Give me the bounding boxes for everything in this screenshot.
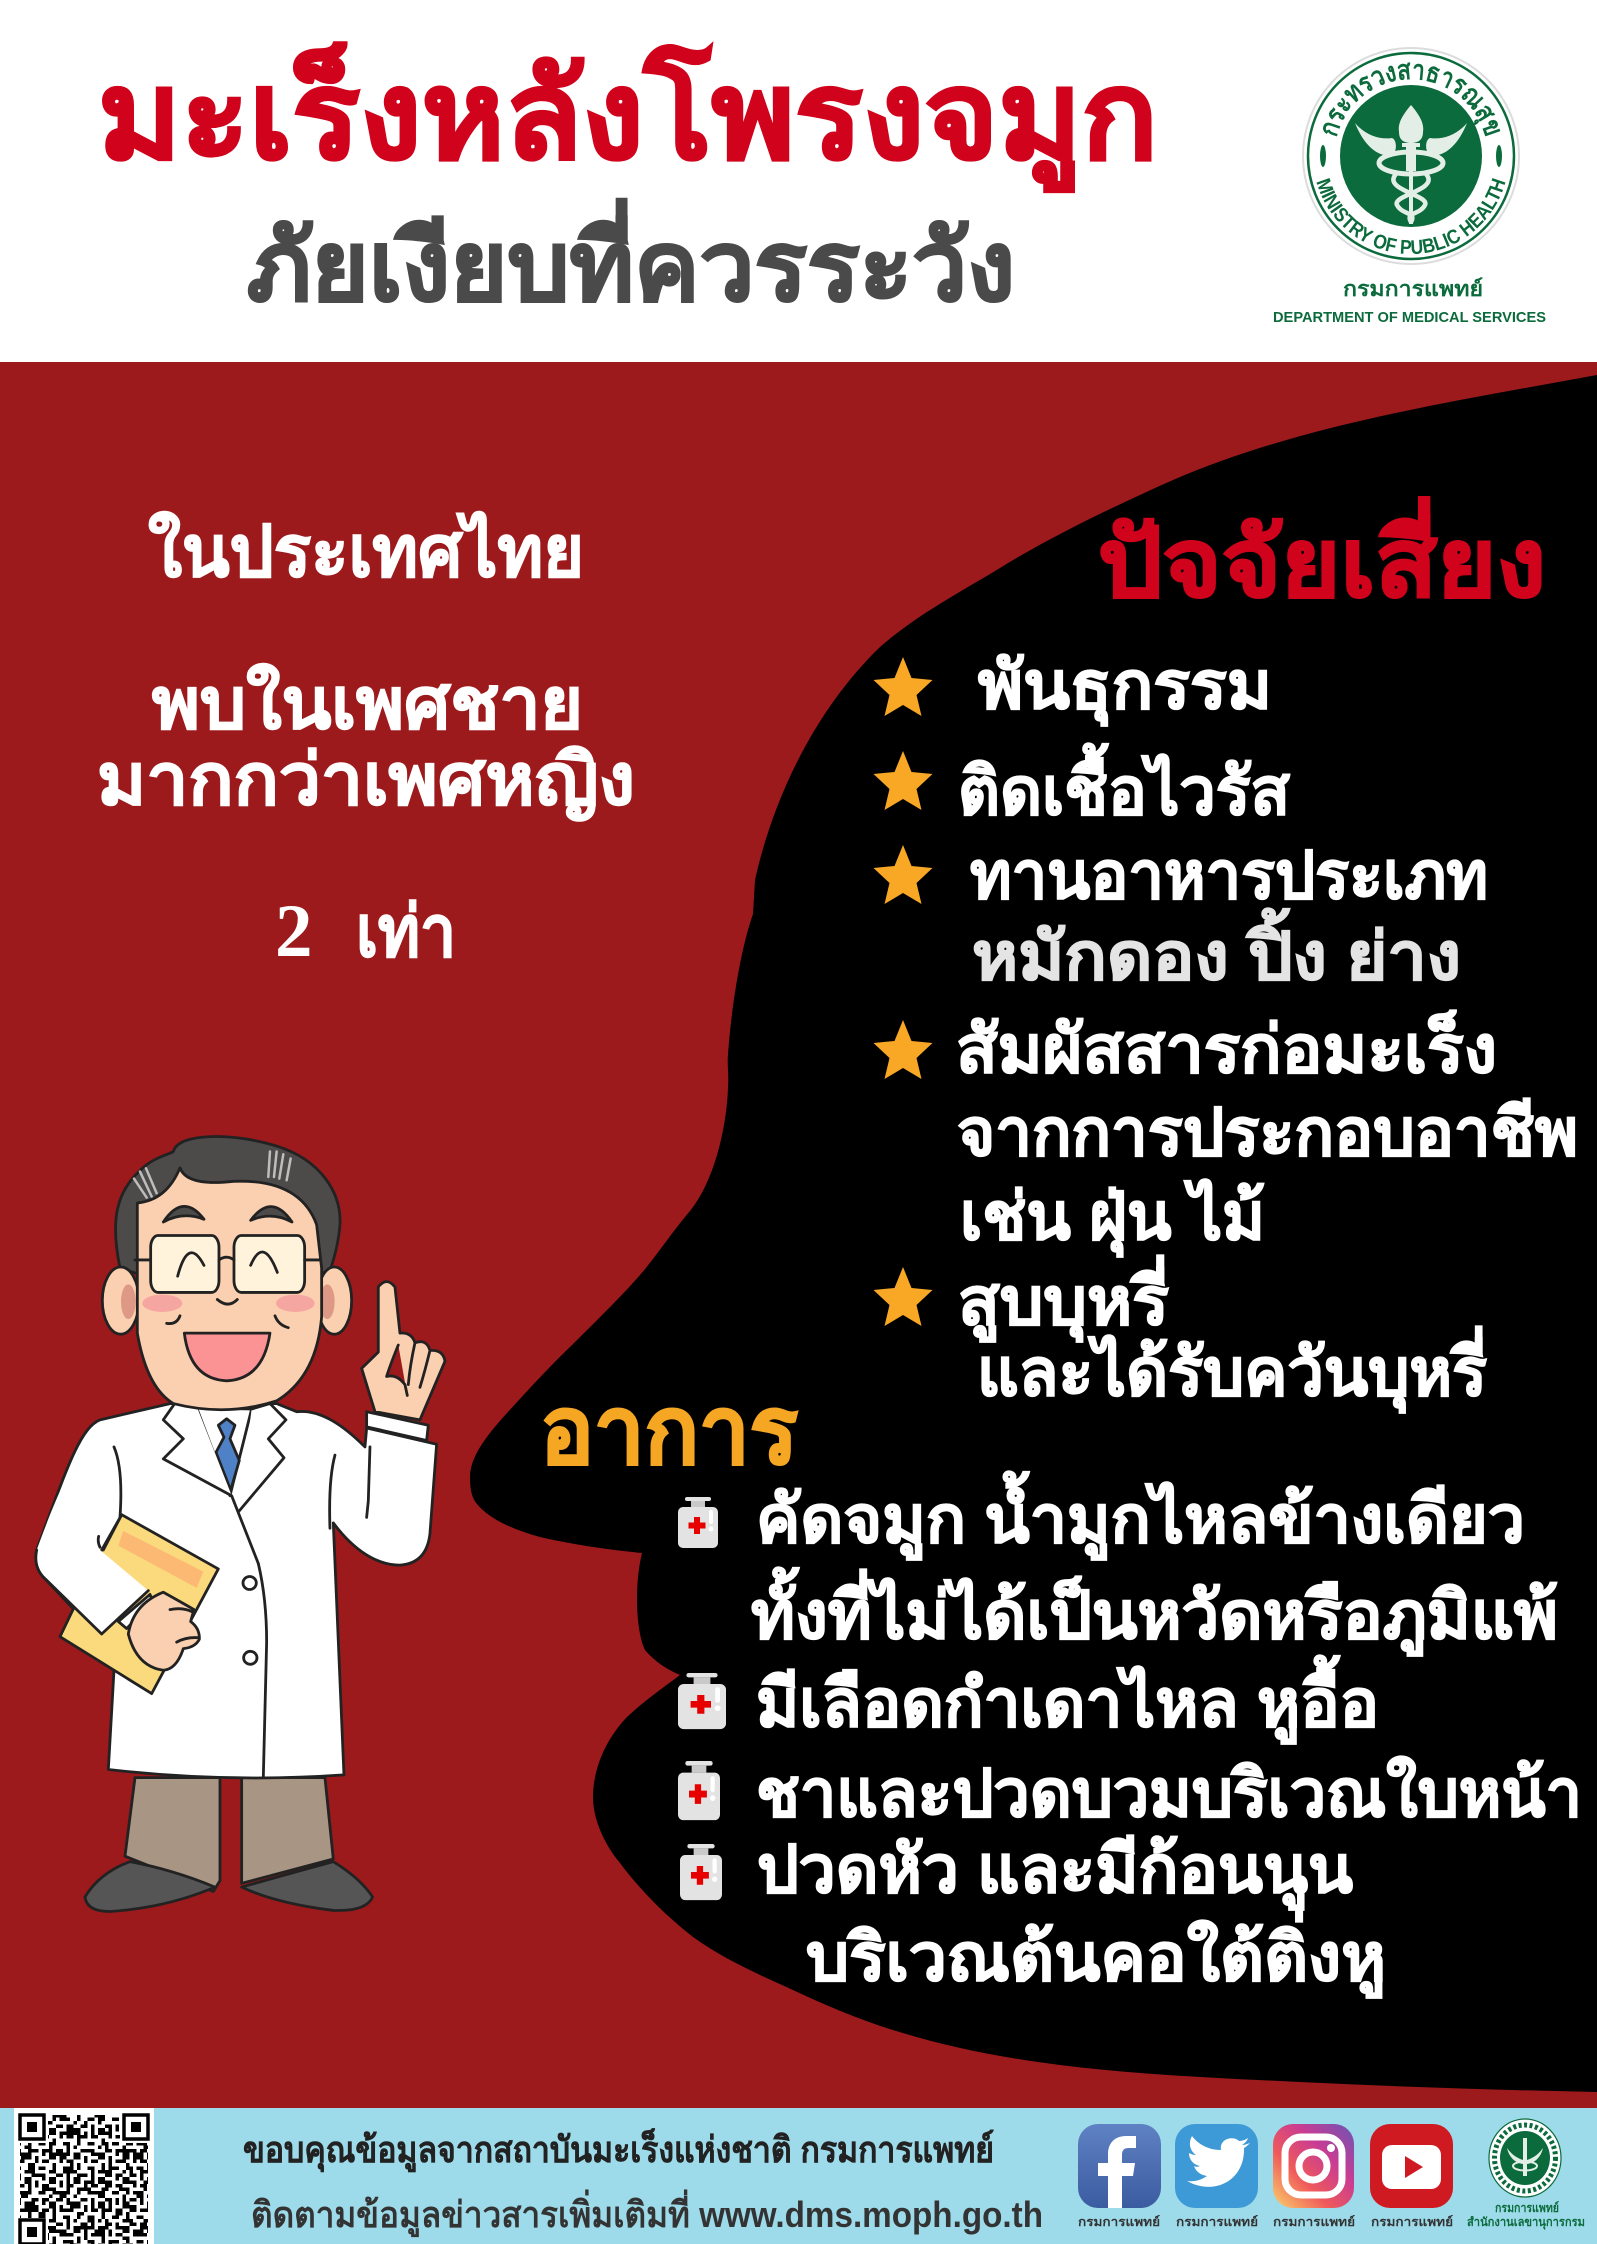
doctor cheeks [142, 1295, 315, 1312]
logo caption: department thai: กรมการแพทย์ [1343, 277, 1483, 301]
doctor folder [60, 1515, 218, 1694]
risk item: smoking: สูบบุหรี่ [958, 1254, 1169, 1343]
logo: ministry of public health seal: MINISTRY OF PUBLIC HEALTH [1316, 178, 1506, 254]
doctor holding hand [128, 1592, 199, 1670]
risk item: carcinogen exposure: จากการประกอบอาชีพ [957, 1095, 1578, 1169]
icon: twitter [1175, 2124, 1258, 2208]
symptom: headache and neck lump [757, 1832, 1386, 1999]
stat: 2 times [275, 890, 456, 973]
symptom: nosebleed: มีเลือดกำเดาไหล หูอื้อ [756, 1654, 1379, 1745]
panel: black head silhouette [470, 375, 1597, 2092]
risk item: carcinogen exposure: สัมผัสสารก่อมะเร็ง [956, 1009, 1497, 1086]
risk item: carcinogen exposure: เช่น ฝุ่น ไม้ [960, 1178, 1265, 1258]
doctor mouth [184, 1333, 270, 1381]
icon: medicine bottle 1 [678, 1497, 718, 1548]
social labels [1078, 2215, 1453, 2229]
footer seal caption: กรมการแพทย์ [1495, 2201, 1559, 2215]
doctor raised hand [362, 1282, 445, 1420]
doctor shoes [85, 1862, 373, 1912]
QR code [14, 2108, 154, 2244]
risk item: smoking: และได้รับควันบุหรี่ [977, 1325, 1487, 1414]
doctor shirt and tie [197, 1408, 252, 1496]
logo: footer seal [1489, 2119, 1561, 2197]
doctor eyebrows [163, 1206, 292, 1222]
doctor ears [102, 1267, 352, 1334]
symptom: congestion [751, 1470, 1558, 1657]
heading: symptoms: อาการ [540, 1378, 798, 1483]
text block: more than women: มากกว่าเพศหญิง [97, 741, 635, 822]
doctor closed eyes [178, 1252, 277, 1276]
risk item: genetics: พันธุกรรม [978, 648, 1272, 727]
risk item: smoking [958, 1254, 1487, 1414]
panel: red background [0, 362, 1597, 2108]
icon: star 4 [874, 1020, 932, 1079]
icon: star 3 [874, 845, 932, 904]
symptom: congestion: ทั้งที่ไม่ได้เป็นหวัดหรือภูมิแพ้ [751, 1566, 1558, 1657]
illustration: doctor [36, 1137, 445, 1912]
social labels: กรมการแพทย์ [1273, 2215, 1355, 2229]
doctor cuff [367, 1412, 428, 1440]
subtitle: ภัยเงียบที่ควรระวัง [247, 198, 1015, 321]
doctor lapels [163, 1401, 286, 1563]
symptom: headache and neck lump: บริเวณต้นคอใต้ติ่งหู [806, 1910, 1386, 1999]
doctor coat [36, 1404, 437, 1778]
footer seal caption: สำนักงานเลขานุการกรม [1467, 2215, 1585, 2230]
icon: medicine bottle 2 [678, 1673, 726, 1729]
stat: 2 times: เท่า [356, 893, 456, 972]
doctor trousers [125, 1778, 333, 1891]
logo: ministry of public health seal: กระทรวงสาธารณสุข [1322, 62, 1500, 136]
title: มะเร็งหลังโพรงจมูก [98, 42, 1158, 192]
doctor glasses [135, 1236, 321, 1292]
icon: star 1 [874, 657, 932, 716]
stat: 2 times: 2 [275, 890, 312, 973]
social labels: กรมการแพทย์ [1371, 2215, 1453, 2229]
doctor coat seams and buttons [243, 1447, 370, 1778]
logo caption: department english: DEPARTMENT OF MEDICAL SERVICES [1273, 309, 1546, 326]
heading: risk factors: ปัจจัยเสี่ยง [1098, 496, 1546, 617]
icon: medicine bottle 4 [680, 1844, 722, 1900]
text block: found in men: พบในเพศชาย [152, 662, 583, 744]
background: white header [0, 0, 1597, 362]
icon: star 5 [874, 1267, 932, 1326]
panel: footer [0, 2108, 1597, 2244]
social labels: กรมการแพทย์ [1176, 2215, 1258, 2229]
footer text: website: ติดตามข้อมูลข่าวสารเพิ่มเติมที่ www.dms.moph.go.th [251, 2189, 1043, 2238]
symptom: headache and neck lump: ปวดหัว และมีก้อนนูน [757, 1832, 1353, 1911]
symptom: congestion: คัดจมูก น้ำมูกไหลข้างเดียว [756, 1470, 1525, 1561]
risk item: food: หมักดอง ปิ้ง ย่าง [972, 907, 1461, 993]
doctor nose and smile lines [167, 1299, 288, 1328]
risk item: virus infection: ติดเชื้อไวรัส [958, 742, 1291, 828]
risk item: food [970, 838, 1488, 993]
icon: facebook [1078, 2124, 1161, 2208]
logo: ministry of public health seal [1302, 47, 1520, 265]
risk item: carcinogen exposure [956, 1009, 1578, 1258]
doctor grey hair highlights [134, 1151, 291, 1198]
icon: instagram [1273, 2124, 1354, 2208]
icon: medicine bottle 3 [678, 1761, 720, 1820]
social labels: กรมการแพทย์ [1078, 2215, 1160, 2229]
icon: star 2 [874, 751, 932, 810]
heading: in Thailand: ในประเทศไทย [148, 510, 584, 592]
symptom: facial numbness: ชาและปวดบวมบริเวณใบหน้า [756, 1754, 1582, 1830]
doctor left sleeve [36, 1445, 153, 1634]
doctor face [137, 1168, 322, 1410]
footer text: credit: ขอบคุณข้อมูลจากสถาบันมะเร็งแห่งชาติ กรมการแพทย์ [243, 2127, 994, 2173]
icon: youtube [1370, 2124, 1453, 2208]
doctor hair [115, 1137, 340, 1273]
risk item: food: ทานอาหารประเภท [970, 838, 1488, 912]
footer seal caption [1467, 2201, 1585, 2230]
